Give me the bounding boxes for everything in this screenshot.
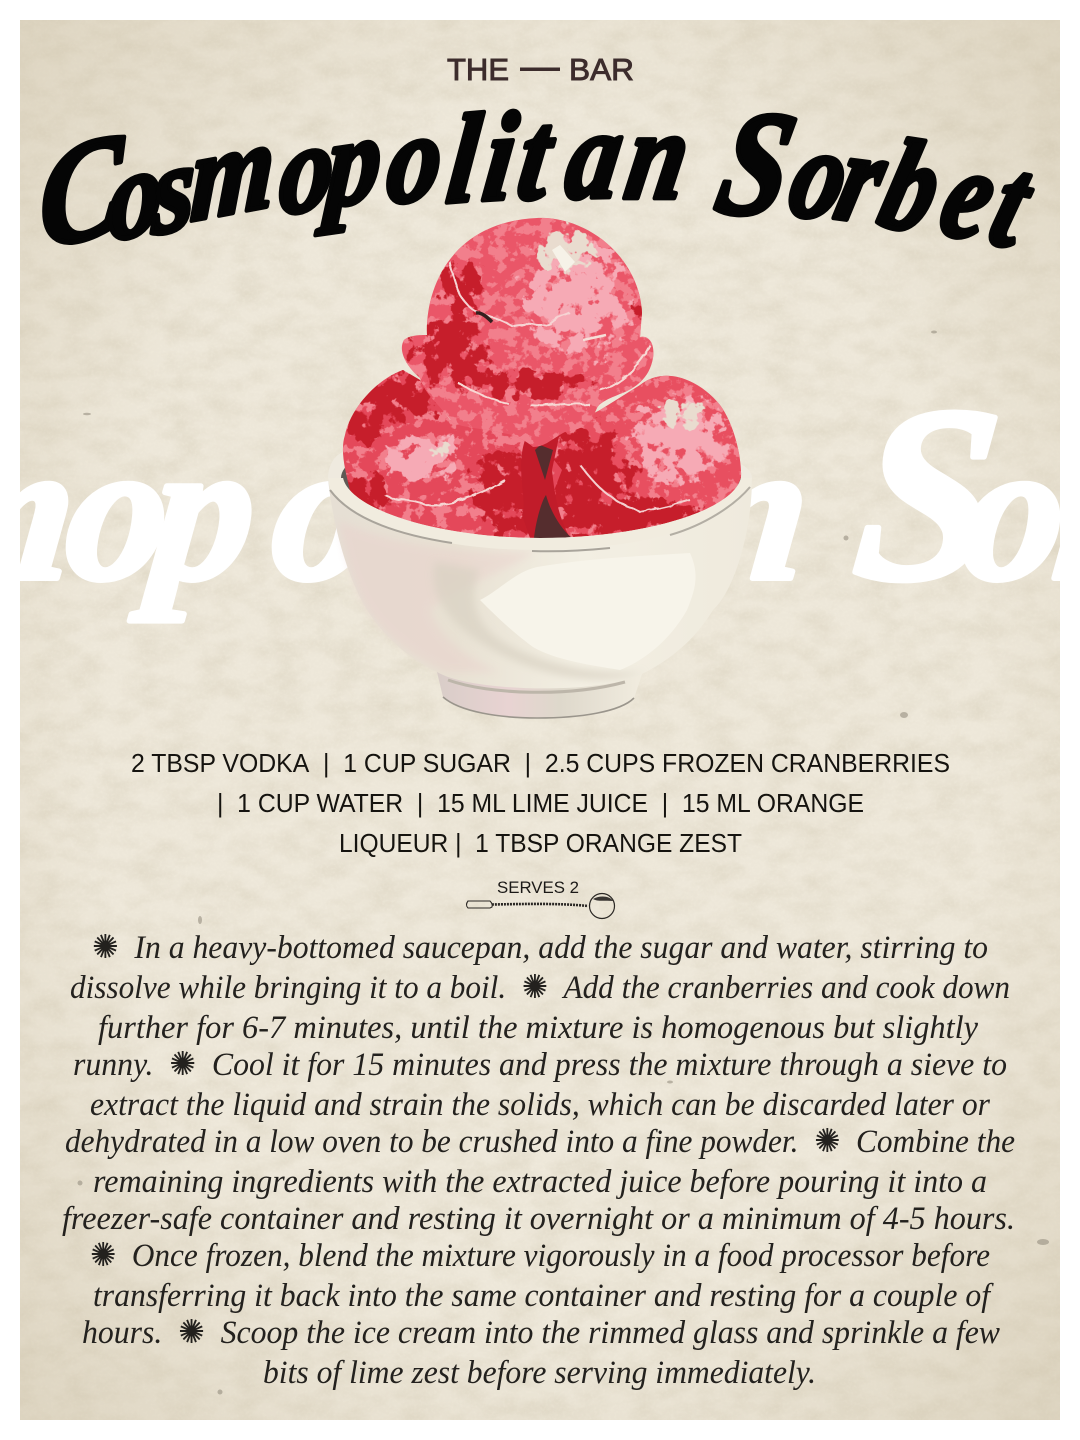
method text: bits of lime zest before serving immediately. <box>263 1355 816 1391</box>
method text: ✺ Once frozen, blend the mixture vigorously in a food processor before <box>90 1238 990 1274</box>
main title: Cosmopolitan Sorbet on an arch: S <box>704 79 809 248</box>
top sorbet scoop <box>402 218 654 447</box>
method text: runny. ✺ Cool it for 15 minutes and press the mixture through a sieve to <box>73 1047 1007 1083</box>
brand label: THE — BAR <box>447 52 634 87</box>
ingredients list: LIQUEUR | 1 TBSP ORANGE ZEST <box>339 828 742 858</box>
main title: Cosmopolitan Sorbet on an arch: C <box>12 102 153 281</box>
method text: remaining ingredients with the extracted juice before pouring it into a <box>93 1164 987 1200</box>
ingredients list <box>131 748 950 858</box>
bowl body <box>328 478 752 718</box>
bowl highlight <box>480 553 696 670</box>
rim band <box>328 478 752 550</box>
method text: dehydrated in a low oven to be crushed into a fine powder. ✺ Combine the <box>65 1124 1015 1160</box>
method text: extract the liquid and strain the solids, which can be discarded later or <box>90 1087 990 1123</box>
crevice between lower scoops <box>521 432 570 538</box>
pink reflection on bowl <box>338 520 535 672</box>
main title: Cosmopolitan Sorbet on an arch: osmopolitan <box>86 85 733 269</box>
bowl back rim and interior <box>328 426 752 530</box>
main title: Cosmopolitan Sorbet on an arch: orbet <box>772 103 1055 275</box>
servings label: SERVES 2 <box>497 878 579 897</box>
ingredients list: | 1 CUP WATER | 15 ML LIME JUICE | 15 ML ORANGE <box>217 788 864 818</box>
icon: bar spoon <box>466 894 614 918</box>
method text: ✺ In a heavy-bottomed saucepan, add the sugar and water, stirring to <box>92 930 988 966</box>
illustration: bowl of cranberry sorbet <box>328 210 760 718</box>
background title: white oversized script: S <box>845 357 1011 633</box>
bowl shade <box>433 562 645 680</box>
brand label: THE — BAR: THE <box>447 52 509 87</box>
method text: dissolve while bringing it to a boil. ✺ Add the cranberries and cook down <box>70 970 1010 1006</box>
method text: freezer-safe container and resting it overnight or a minimum of 4-5 hours. <box>62 1201 1015 1237</box>
method text: hours. ✺ Scoop the ice cream into the rimmed glass and sprinkle a few <box>82 1315 1000 1351</box>
method text: further for 6-7 minutes, until the mixture is homogenous but slightly <box>98 1010 978 1046</box>
brand label: THE — BAR: BAR <box>569 52 634 87</box>
method text: transferring it back into the same container and resting for a couple of <box>93 1278 994 1314</box>
method text <box>62 930 1015 1391</box>
ingredients list: 2 TBSP VODKA | 1 CUP SUGAR | 2.5 CUPS FROZEN CRANBERRIES <box>131 748 950 778</box>
bowl foot <box>437 672 642 718</box>
left sorbet scoop <box>342 370 562 538</box>
right sorbet scoop <box>554 376 742 537</box>
